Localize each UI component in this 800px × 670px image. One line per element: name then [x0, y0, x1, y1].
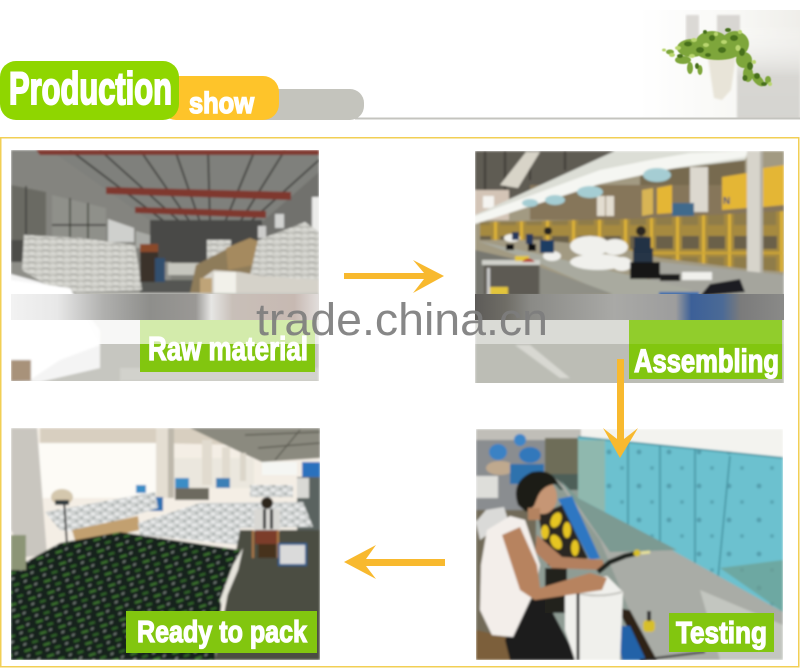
back area [530, 185, 784, 220]
bags & workers [504, 234, 712, 280]
back right [297, 477, 320, 547]
ledge dark edge and blue [617, 608, 657, 660]
workers [140, 248, 158, 282]
heading word: show: show [189, 87, 255, 120]
conveyor [484, 242, 650, 294]
panel: raw material photo [11, 150, 319, 383]
columns [11, 428, 47, 557]
pile left [22, 235, 142, 293]
beam stripes [36, 150, 319, 218]
label: Raw material [140, 320, 315, 372]
head [529, 480, 557, 514]
packs [11, 532, 240, 660]
fan [51, 489, 73, 505]
label: Raw material: Raw material [148, 330, 308, 367]
nozzle on ledge [643, 620, 655, 632]
panel: ready to pack photo [11, 428, 320, 660]
panel frame [1, 138, 799, 667]
ceiling [40, 428, 240, 445]
yellow boards [642, 165, 784, 216]
panel: testing photo [476, 429, 783, 660]
arm back [535, 535, 604, 570]
pants [505, 598, 578, 660]
watermark band: raw material photo [11, 294, 319, 344]
header plant photo [661, 10, 800, 118]
arm front [502, 527, 607, 600]
trunking [475, 151, 750, 222]
heading word: Production: Production [9, 63, 172, 114]
floor [555, 478, 783, 660]
torso [480, 516, 540, 637]
box [279, 544, 306, 565]
shelving [480, 211, 784, 272]
windows [11, 185, 150, 248]
left bag row [45, 492, 158, 532]
aqua wall [578, 436, 783, 612]
tab: green [0, 61, 179, 120]
bright windows [38, 443, 156, 498]
top wall [580, 429, 783, 458]
dark floor right [215, 530, 320, 660]
floor [650, 262, 784, 294]
arrow: assembling to testing [603, 359, 638, 458]
watermark band: assembling photo [475, 294, 784, 344]
label: Testing: Testing [676, 615, 767, 650]
back bag rows [250, 485, 293, 497]
blue stuff [136, 485, 146, 493]
watermark text: trade.china.cn [256, 294, 548, 345]
floor [11, 293, 319, 383]
arrow: testing to ready to pack [344, 545, 445, 579]
spray gun [598, 553, 638, 572]
white bag [565, 576, 623, 660]
column [745, 151, 762, 274]
seat area [476, 508, 538, 634]
floor [72, 516, 140, 544]
clutter [476, 440, 548, 510]
panel: assembling photo: N [723, 196, 730, 207]
arrow: raw material to assembling [344, 260, 444, 293]
worker [254, 509, 280, 531]
heading: Production show [0, 61, 364, 120]
blue crate [558, 496, 600, 560]
floor shine [515, 345, 570, 378]
header divider line [355, 118, 800, 120]
tab: gray [250, 89, 364, 120]
pile right [249, 220, 319, 281]
tab: orange [160, 76, 279, 120]
roof [475, 151, 614, 200]
panel: assembling photo [475, 151, 784, 386]
label: Ready to pack: Ready to pack [137, 614, 308, 649]
label: Ready to pack [126, 611, 317, 653]
label: Assembling [629, 320, 782, 379]
pile center [207, 240, 231, 266]
